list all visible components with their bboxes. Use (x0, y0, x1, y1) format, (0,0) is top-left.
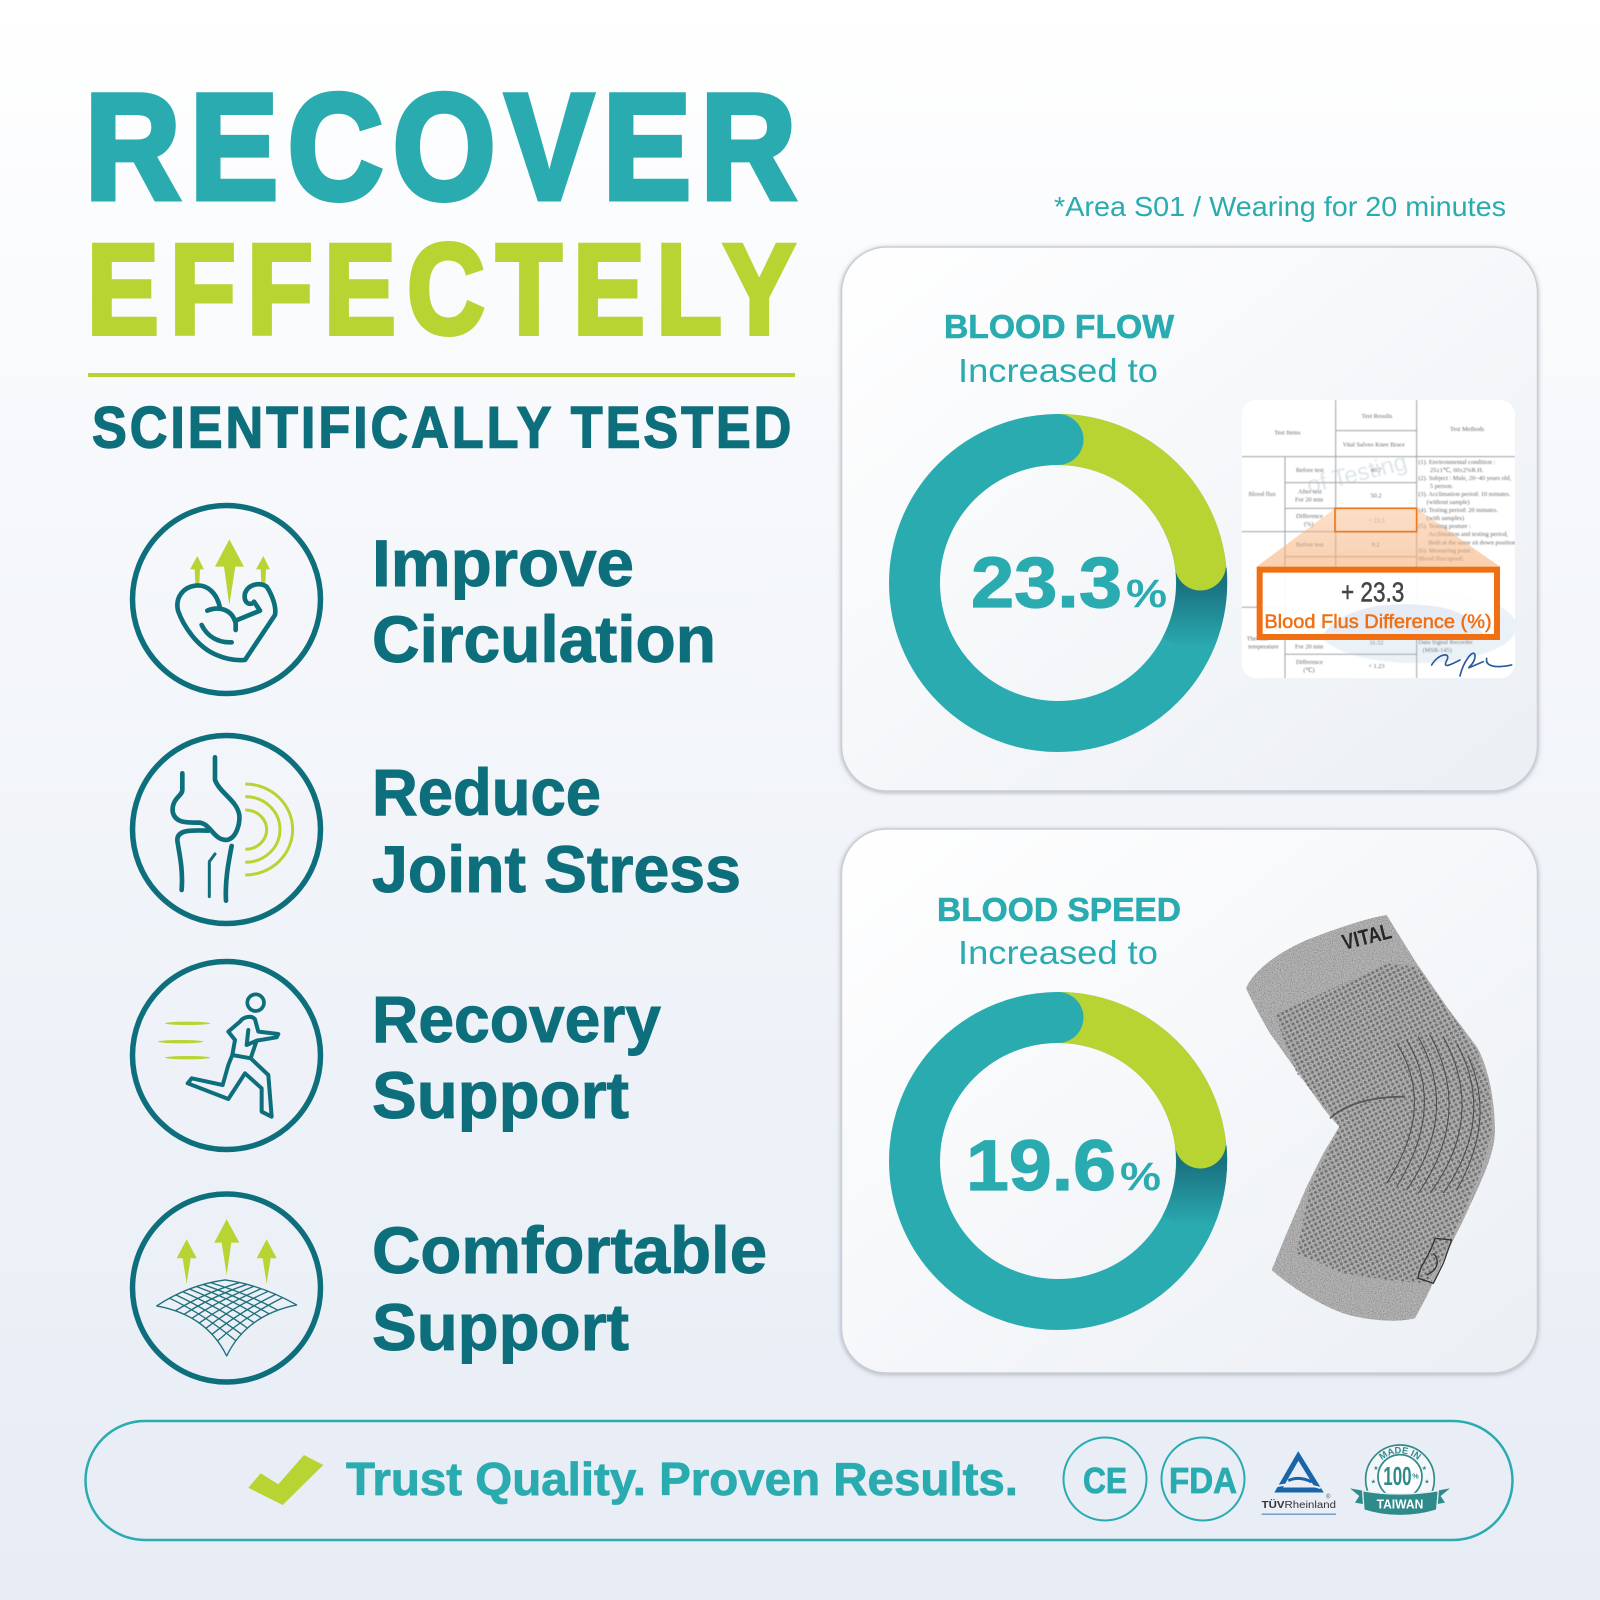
test report excerpt: (MSR-145) (1423, 647, 1452, 654)
label: Support (372, 1290, 629, 1364)
test report excerpt: 40.7 (1371, 467, 1382, 474)
badge: made in Taiwan: MADE IN (1378, 1447, 1422, 1460)
label: Circulation (372, 602, 716, 676)
test report excerpt: + 23.3 (1341, 577, 1404, 608)
test report excerpt: Test Results (1362, 413, 1393, 420)
test report excerpt: Both at the same sit down position. (1428, 540, 1518, 547)
title: effectely: EFFECTELY (87, 219, 795, 362)
icon: knee joint (132, 736, 320, 924)
logo: TUV Rheinland: TÜVRheinland (1262, 1498, 1336, 1511)
donut chart: 23.3 (971, 544, 1122, 623)
test report excerpt: Blood flux (1249, 491, 1277, 498)
badge: made in Taiwan: ★ (1373, 1465, 1379, 1472)
test report excerpt: Difference (1296, 659, 1323, 666)
badge: made in Taiwan (1350, 1444, 1450, 1515)
label (372, 526, 716, 676)
test report excerpt: Difference (1296, 513, 1323, 520)
product: elbow sleeve (1246, 915, 1495, 1321)
test report excerpt: + 1.23 (1368, 663, 1385, 670)
bottom banner (84, 1420, 1514, 1542)
test report excerpt: After test (1298, 488, 1322, 495)
benefit: reduce joint stress (132, 736, 741, 924)
donut chart (914, 992, 1226, 1304)
heading rule (88, 373, 795, 377)
benefit: improve circulation (132, 506, 716, 694)
badge: made in Taiwan: ★ (1422, 1465, 1427, 1472)
label (372, 755, 741, 906)
test report excerpt: Vital Salveo Knee Brace (1343, 442, 1405, 449)
test report excerpt: (1). Environmental condition : (1418, 459, 1496, 466)
test report excerpt: (℃) (1303, 667, 1315, 674)
badge: FDA: FDA (1169, 1460, 1237, 1501)
title: recover: RECOVER (85, 63, 796, 230)
test report excerpt: For 20 min (1295, 496, 1324, 503)
label: Support (372, 1058, 629, 1132)
donut chart: 19.6 (966, 1127, 1116, 1206)
test report excerpt: 31.52 (1369, 640, 1384, 647)
subheading: Increased to (958, 934, 1158, 971)
badge: made in Taiwan: ★ (1371, 1478, 1376, 1485)
donut chart: % (1126, 572, 1167, 616)
test report excerpt: Before test (1296, 542, 1324, 549)
label (372, 1213, 767, 1364)
label: Improve (372, 526, 634, 600)
label: Joint Stress (372, 832, 741, 906)
label: Comfortable (372, 1213, 767, 1287)
label: Recovery (372, 982, 661, 1056)
test report excerpt (1242, 400, 1518, 678)
donut chart: % (1120, 1155, 1161, 1199)
benefit: comfortable support (132, 1194, 767, 1382)
panel: blood speed (842, 829, 1538, 1373)
card (842, 247, 1538, 791)
subheading: Increased to (958, 352, 1158, 389)
test report excerpt: of Testing (1304, 448, 1410, 499)
label: Reduce (372, 755, 601, 829)
test report excerpt: 50.2 (1371, 493, 1382, 500)
card (842, 829, 1538, 1373)
test report excerpt: Before test (1296, 467, 1324, 474)
badge: CE (1064, 1438, 1146, 1520)
badge: FDA (1162, 1438, 1244, 1520)
icon: check mark (248, 1455, 323, 1505)
test report excerpt: (without sample) (1427, 499, 1470, 506)
product: elbow sleeve: VITAL (1339, 918, 1394, 955)
test report excerpt: 9.2 (1372, 542, 1380, 549)
benefit: recovery support (132, 962, 661, 1150)
donut chart (914, 414, 1226, 726)
test report excerpt: (with samples) (1427, 515, 1464, 522)
label (372, 982, 661, 1132)
badge: CE: CE (1083, 1460, 1127, 1501)
test report excerpt: (5). Testing posture : (1418, 523, 1471, 530)
heading: BLOOD SPEED (937, 891, 1181, 928)
test report excerpt: Thermal (1247, 636, 1268, 643)
test report excerpt: (%) (1304, 521, 1313, 528)
test report excerpt: 5 person. (1430, 483, 1454, 490)
icon: mesh with arrows (132, 1194, 320, 1382)
slogan: Trust Quality. Proven Results. (346, 1453, 1018, 1505)
logo: TUV Rheinland: ® (1326, 1494, 1331, 1501)
icon: muscle with arrows (132, 506, 320, 694)
test report excerpt: (2). Subject : Male, 20~40 years old, (1418, 475, 1512, 482)
badge: made in Taiwan: TAIWAN (1377, 1496, 1423, 1511)
test report excerpt: + 23.3 (1368, 517, 1385, 524)
badge: made in Taiwan: 100 (1383, 1461, 1412, 1491)
badge: made in Taiwan: ★ (1424, 1478, 1430, 1485)
test report excerpt: (3). Acclimation period: 10 minutes. (1418, 491, 1511, 498)
banner outline (86, 1421, 1512, 1540)
footnote: *Area S01 / Wearing for 20 minutes (1054, 191, 1506, 222)
test report excerpt: Data Signal Recorder (1418, 639, 1474, 646)
logo: TUV Rheinland (1262, 1456, 1336, 1515)
test report excerpt: Acclimation and testing period, (1428, 531, 1509, 538)
test report excerpt: Blood flux/speed: (1418, 556, 1464, 563)
test report excerpt: Test Methods (1450, 426, 1485, 433)
badge: made in Taiwan: % (1412, 1471, 1419, 1480)
test report excerpt: Test Items (1274, 429, 1301, 436)
test report excerpt: (4). Testing period: 20 minutes. (1418, 507, 1498, 514)
test report excerpt: Blood Flus Difference (%) (1264, 612, 1492, 633)
icon: runner (132, 962, 320, 1150)
test report excerpt: 25±1℃, 60±2%R.H. (1430, 467, 1484, 474)
test report excerpt: (6). Measuring point : (1418, 548, 1474, 555)
subtitle: SCIENTIFICALLY TESTED (92, 395, 791, 460)
heading: BLOOD FLOW (944, 308, 1175, 345)
test report excerpt: For 20 min (1295, 644, 1324, 651)
test report excerpt: temperature (1248, 644, 1279, 651)
panel: blood flow (842, 247, 1538, 791)
